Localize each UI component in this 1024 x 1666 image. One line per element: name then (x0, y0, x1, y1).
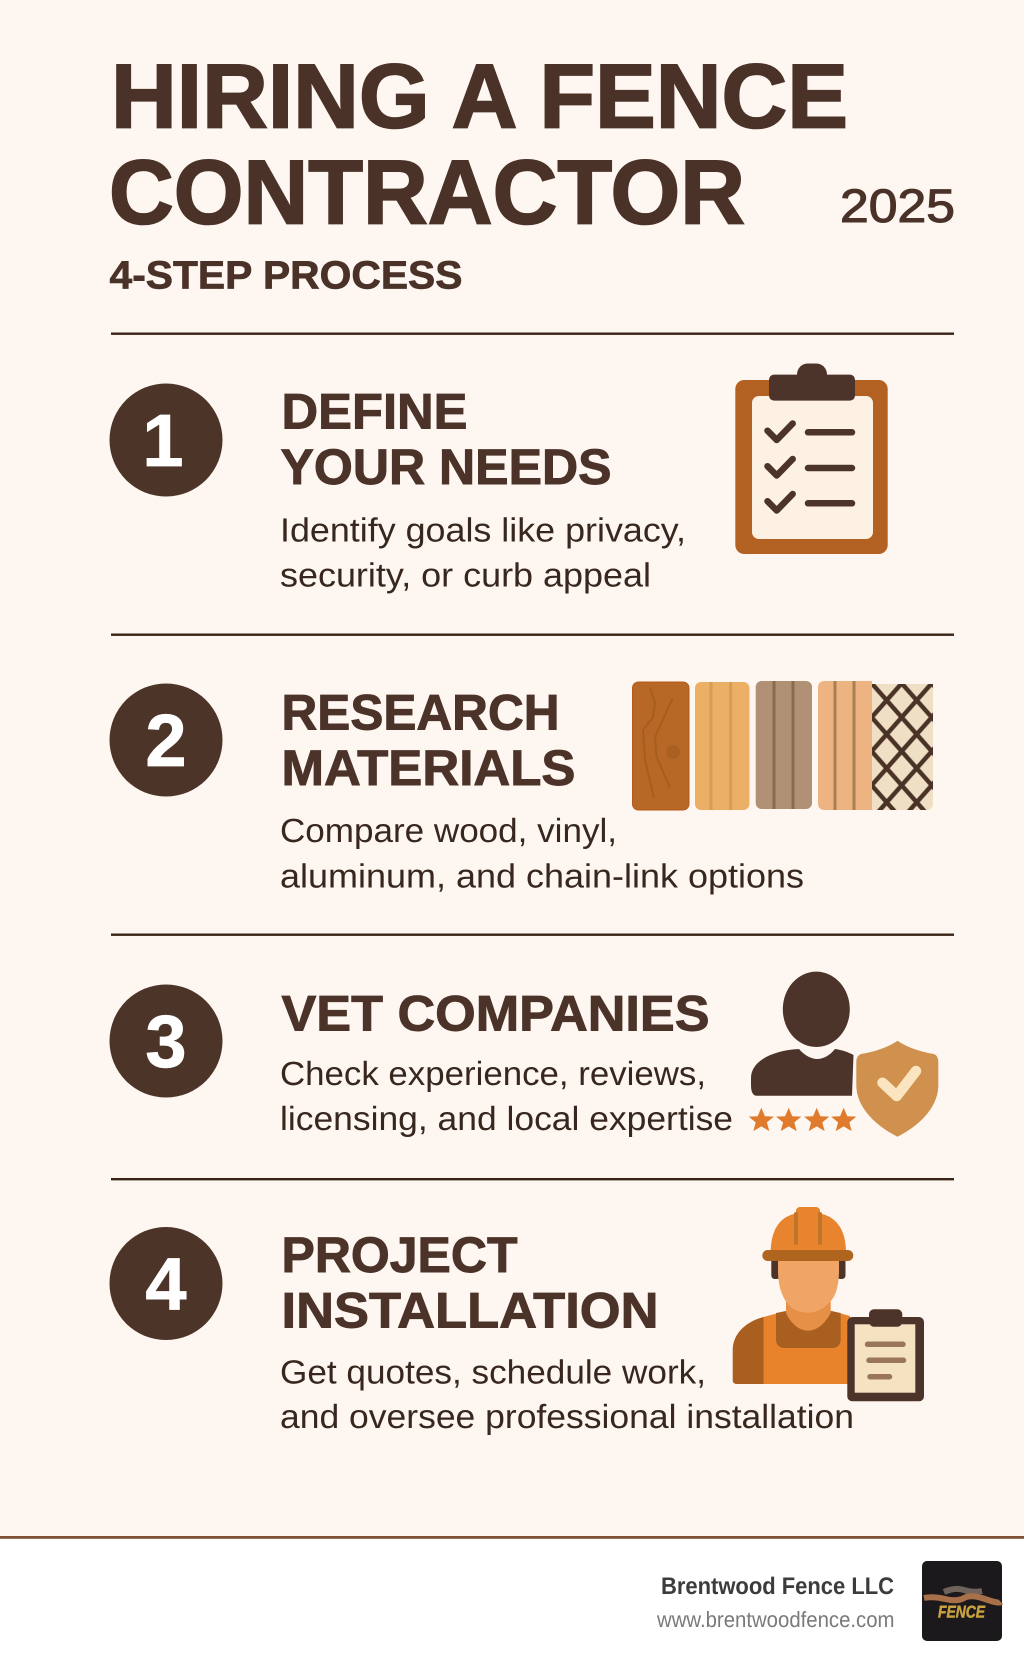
panel: step 4 project installation (110, 1207, 924, 1436)
description: step 3: licensing, and local expertise (280, 1101, 733, 1138)
description: step 1 (280, 512, 686, 594)
title (109, 46, 848, 244)
panel: step 1 define your needs (110, 364, 888, 594)
step number 2 (110, 684, 222, 796)
icon: person with shield and stars (749, 972, 938, 1137)
description: step 4: Get quotes, schedule work, (280, 1354, 706, 1392)
vinyl sample (695, 682, 750, 810)
description: step 1: Identify goals like privacy, (280, 512, 686, 550)
heading: research materials: RESEARCH (282, 684, 560, 740)
heading: define your needs (280, 384, 612, 495)
heading: research materials: MATERIALS (282, 740, 576, 796)
icon: clipboard checklist (735, 364, 888, 554)
step number 4: 4 (145, 1242, 187, 1326)
description: step 1: security, or curb appeal (280, 558, 651, 594)
description: step 4: and oversee professional installation (280, 1399, 854, 1436)
step number 3: 3 (145, 1000, 187, 1083)
heading: define your needs: YOUR NEEDS (280, 439, 612, 495)
icon: company logo: FENCE (938, 1602, 986, 1622)
year: 2025 (840, 179, 955, 232)
description: step 4 (280, 1354, 854, 1436)
icon: construction worker with clipboard (733, 1207, 924, 1401)
step number 2: 2 (145, 699, 187, 782)
chain-link sample (872, 684, 933, 810)
heading: research materials (282, 684, 576, 796)
panel: step 2 research materials (110, 681, 933, 896)
description: step 3: Check experience, reviews, (280, 1056, 706, 1093)
step number 1: 1 (142, 399, 184, 482)
wood sample (632, 682, 689, 810)
step number 3 (110, 984, 222, 1098)
description: step 2 (280, 813, 804, 896)
heading: project installation: INSTALLATION (282, 1282, 658, 1338)
title: HIRING A FENCE (111, 46, 848, 148)
footer company name: Brentwood Fence LLC (661, 1573, 894, 1600)
aluminum sample (818, 681, 872, 810)
heading: vet companies: VET COMPANIES (282, 986, 710, 1042)
description: step 2: aluminum, and chain-link options (280, 858, 804, 896)
composite sample (756, 681, 812, 809)
footer (0, 1536, 1024, 1666)
step number 1 (110, 384, 222, 496)
subtitle: 4-STEP PROCESS (110, 254, 462, 298)
heading: project installation: PROJECT (282, 1227, 518, 1283)
panel: step 3 vet companies (110, 972, 938, 1138)
icon: company logo (922, 1561, 1002, 1641)
description: step 2: Compare wood, vinyl, (280, 813, 617, 850)
icon: fence material samples (632, 681, 933, 810)
heading: define your needs: DEFINE (282, 384, 468, 440)
description: step 3 (280, 1056, 733, 1138)
heading: project installation (282, 1227, 658, 1338)
title: CONTRACTOR (109, 142, 745, 244)
footer website: www.brentwoodfence.com (656, 1607, 894, 1632)
step number 4 (110, 1227, 222, 1340)
